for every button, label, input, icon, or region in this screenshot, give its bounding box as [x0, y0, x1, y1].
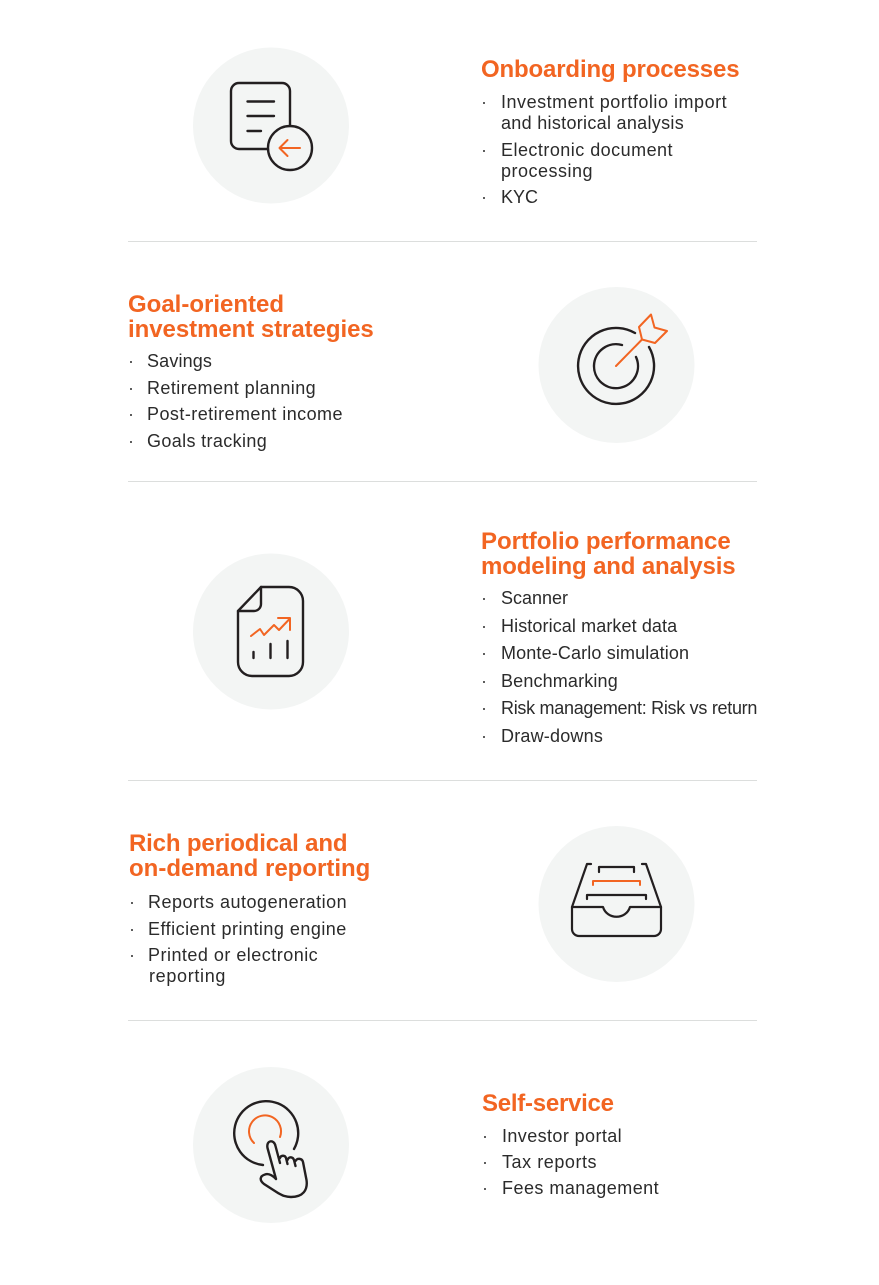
list: onboarding: processing [501, 161, 593, 181]
list: reporting: reporting [149, 966, 226, 986]
list: self-service: · [482, 1126, 488, 1146]
list: goals [128, 351, 343, 451]
list: onboarding: · [481, 187, 487, 207]
list: portfolio: · [481, 726, 487, 746]
icon: report document with chart [193, 554, 349, 710]
list: portfolio: Scanner [501, 588, 568, 608]
list: onboarding: · [481, 140, 487, 160]
list: onboarding: Investment portfolio import [501, 92, 727, 112]
heading: goal-oriented investment strategies: investment strategies [128, 316, 374, 343]
list: self-service [482, 1126, 659, 1198]
list: goals: Savings [147, 351, 212, 371]
list: portfolio: Benchmarking [501, 671, 618, 691]
list: goals: · [128, 431, 134, 451]
list: onboarding: KYC [501, 187, 538, 207]
list: goals: · [128, 404, 134, 424]
list: portfolio: · [481, 671, 487, 691]
heading: onboarding processes: Onboarding processes [481, 56, 739, 83]
list: goals: · [128, 378, 134, 398]
list: self-service: Investor portal [502, 1126, 622, 1146]
list: reporting [129, 892, 347, 986]
heading: reporting: on-demand reporting [129, 855, 370, 882]
list: onboarding: Electronic document [501, 140, 673, 160]
list: portfolio: · [481, 643, 487, 663]
icon: document with back arrow [193, 48, 349, 204]
icon: target with dart [538, 287, 694, 443]
heading: portfolio performance: Portfolio performance [481, 528, 731, 555]
list: reporting: Reports autogeneration [148, 892, 347, 912]
list: self-service: · [482, 1178, 488, 1198]
list: portfolio: · [481, 588, 487, 608]
list: portfolio: Draw-downs [501, 726, 603, 746]
list: reporting: Efficient printing engine [148, 919, 347, 939]
list: onboarding [481, 92, 727, 207]
list: goals: Retirement planning [147, 378, 316, 398]
list: portfolio: Monte-Carlo simulation [501, 643, 689, 663]
list: goals: Goals tracking [147, 431, 267, 451]
list: portfolio: · [481, 698, 487, 718]
heading: portfolio performance: modeling and analysis [481, 553, 735, 580]
list: portfolio: Historical market data [501, 616, 677, 636]
list: onboarding: · [481, 92, 487, 112]
heading: reporting: Rich periodical and [129, 830, 347, 857]
list: goals: · [128, 351, 134, 371]
list: goals: Post-retirement income [147, 404, 343, 424]
list: portfolio: Risk management: Risk vs return [501, 698, 757, 718]
list: self-service: Fees management [502, 1178, 659, 1198]
heading: self-service: Self-service [482, 1090, 614, 1117]
list: reporting: · [129, 919, 135, 939]
list: reporting: Printed or electronic [148, 945, 318, 965]
list: self-service: Tax reports [502, 1152, 597, 1172]
heading: goal-oriented investment strategies [128, 291, 374, 343]
heading: portfolio performance [481, 528, 735, 580]
list: reporting: · [129, 945, 135, 965]
list: portfolio [481, 588, 757, 746]
list: onboarding: and historical analysis [501, 113, 684, 133]
heading: reporting [129, 830, 370, 882]
list: reporting: · [129, 892, 135, 912]
icon: file tray [538, 826, 694, 982]
heading: goal-oriented investment strategies: Goal-oriented [128, 291, 284, 318]
list: portfolio: · [481, 616, 487, 636]
list: self-service: · [482, 1152, 488, 1172]
